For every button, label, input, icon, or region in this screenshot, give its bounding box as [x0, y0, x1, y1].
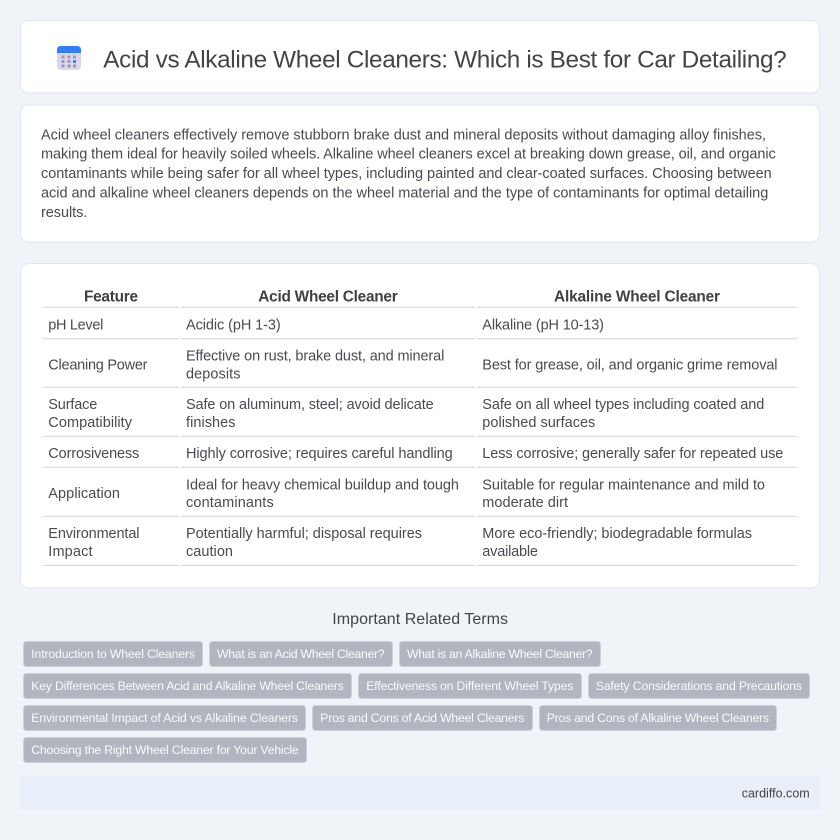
table row: corrosiveness: Less corrosive; generally safer for repeated use: [482, 446, 783, 462]
table row: pH level: Acidic (pH 1-3): [186, 317, 281, 333]
tag row 3: Environmental Impact of Acid vs Alkaline Cleaners: [31, 711, 298, 725]
table row: pH level: Alkaline (pH 10-13): [482, 317, 604, 333]
tag row 1: What is an Alkaline Wheel Cleaner?: [407, 647, 593, 661]
heading: important related terms: Important Related Terms: [332, 611, 508, 628]
table header: Feature: [84, 289, 138, 306]
table row: environmental impact: Potentially harmful; disposal requires: [186, 526, 422, 542]
panel: title header: [20, 20, 820, 93]
text block: description: making them ideal for heavily soiled wheels. Alkaline wheel cleaners excel at breaking down grease, oil, and organic: [41, 146, 776, 162]
table row: application: Ideal for heavy chemical buildup and tough: [186, 477, 459, 493]
tag row 2: Key Differences Between Acid and Alkaline Wheel Cleaners: [31, 679, 344, 693]
table row: surface compatibility: finishes: [186, 415, 236, 431]
table row: cleaning power: deposits: [186, 366, 240, 382]
table row: surface compatibility: Safe on all wheel types including coated and: [482, 397, 764, 413]
table row: cleaning power: [43, 349, 797, 388]
table header: Acid Wheel Cleaner: [258, 289, 398, 306]
tag row 2: [24, 674, 810, 698]
table row: cleaning power: Cleaning Power: [48, 357, 148, 373]
panel: comparison table: [20, 264, 820, 588]
table row: application: Suitable for regular maintenance and mild to: [482, 477, 765, 493]
tag row 2: Safety Considerations and Precautions: [596, 679, 802, 693]
table row: surface compatibility: polished surfaces: [482, 415, 595, 431]
table header: [43, 289, 797, 308]
table row: application: moderate dirt: [482, 495, 568, 511]
text block: description: Acid wheel cleaners effectively remove stubborn brake dust and mineral deposits without damaging alloy finishes,: [41, 127, 766, 143]
table row: application: [43, 477, 797, 517]
table row: pH level: [43, 317, 797, 339]
table row: application: Application: [48, 486, 120, 502]
table row: environmental impact: available: [482, 544, 538, 560]
tag row 3: Pros and Cons of Alkaline Wheel Cleaners: [547, 711, 769, 725]
table row: environmental impact: caution: [186, 544, 233, 560]
footer: [20, 776, 820, 810]
table row: surface compatibility: Safe on aluminum, steel; avoid delicate: [186, 397, 434, 413]
text block: description: acid and alkaline wheel cleaners depends on the wheel material and the type of contaminants for optimal detailing: [41, 185, 768, 201]
tag row 4: Choosing the Right Wheel Cleaner for Your Vehicle: [31, 743, 299, 757]
footer: cardiffo.com: [742, 786, 810, 800]
table row: environmental impact: [43, 526, 797, 566]
text block: description: contaminants while being safer for all wheel types, including painted and clear-coated surfaces. Choosing between: [41, 166, 772, 182]
table row: corrosiveness: [43, 446, 797, 468]
table row: environmental impact: Environmental: [48, 526, 139, 542]
tag row 1: [24, 642, 600, 666]
tag row 1: Introduction to Wheel Cleaners: [31, 647, 195, 661]
table row: environmental impact: More eco-friendly; biodegradable formulas: [482, 526, 752, 542]
table row: environmental impact: Impact: [48, 544, 92, 560]
table row: corrosiveness: Highly corrosive; requires careful handling: [186, 446, 453, 462]
table row: pH level: pH Level: [48, 317, 103, 333]
title: Acid vs Alkaline Wheel Cleaners: Which is Best for Car Detailing?: [103, 46, 787, 73]
tag row 4: [24, 738, 306, 762]
table row: corrosiveness: Corrosiveness: [48, 446, 139, 462]
table row: surface compatibility: Surface: [48, 397, 97, 413]
tag row 3: Pros and Cons of Acid Wheel Cleaners: [320, 711, 524, 725]
tag row 3: [24, 706, 776, 730]
table row: cleaning power: Effective on rust, brake dust, and mineral: [186, 349, 444, 365]
tag row 2: Effectiveness on Different Wheel Types: [366, 679, 573, 693]
tag row 1: What is an Acid Wheel Cleaner?: [217, 647, 385, 661]
icon: calendar: [57, 46, 81, 70]
table row: surface compatibility: [43, 397, 797, 437]
panel: description: [20, 105, 820, 242]
text block: description: [41, 127, 776, 221]
table row: surface compatibility: Compatibility: [48, 415, 133, 431]
table row: application: contaminants: [186, 495, 274, 511]
text block: description: results.: [41, 205, 87, 221]
table header: Alkaline Wheel Cleaner: [554, 289, 720, 306]
panel: related term tags: [24, 642, 810, 762]
table row: cleaning power: Best for grease, oil, and organic grime removal: [482, 357, 778, 373]
